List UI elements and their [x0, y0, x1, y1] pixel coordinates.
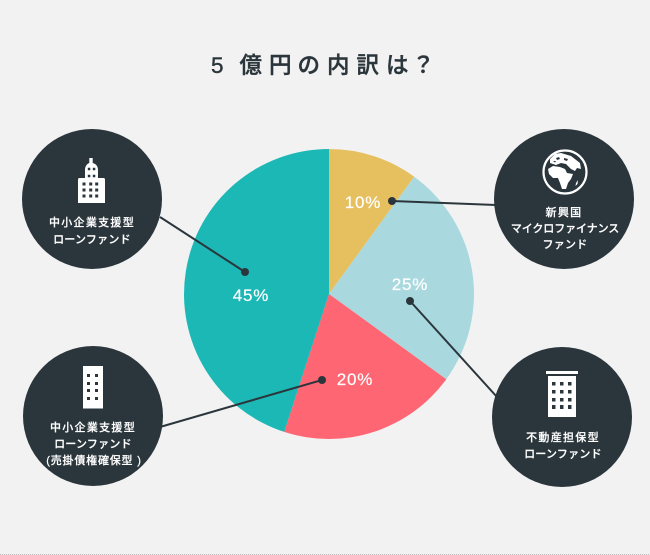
label: 中小企業支援型: [49, 215, 135, 229]
label: ローンファンド: [524, 448, 602, 460]
label: (売掛債権確保型 ): [46, 453, 142, 467]
label: ファンド: [542, 239, 588, 251]
connector: 売掛債権 to 20%: [160, 376, 326, 427]
panel: 新興国マイクロファイナンスファンド: [494, 129, 634, 269]
label: ローンファンド: [54, 438, 132, 450]
label: 不動産担保型: [526, 430, 600, 444]
percent label: 20%: 20%: [337, 370, 373, 389]
label: ローンファンド: [53, 234, 131, 246]
panel: 中小企業支援型ローンファンド: [22, 129, 162, 269]
slice: 10%: [329, 149, 414, 294]
icon: globe: [544, 150, 586, 194]
slice: 20%: [284, 294, 446, 439]
icon: office building: [83, 366, 103, 408]
icon: office block: [546, 371, 578, 417]
percent label: 45%: 45%: [233, 286, 269, 305]
connector: 新興国 to 10%: [388, 197, 496, 205]
percent label: 25%: 25%: [392, 275, 428, 294]
pie chart: [184, 149, 474, 439]
label: 中小企業支援型: [50, 420, 136, 434]
slice: 25%: [329, 177, 474, 379]
label: 新興国: [546, 205, 582, 219]
percent label: 10%: 10%: [345, 193, 381, 212]
label: マイクロファイナンス: [511, 222, 619, 235]
icon: tower building: [78, 158, 105, 203]
connector: 中小企業支援型 to 45%: [160, 217, 249, 276]
panel: 中小企業支援型ローンファンド(売掛債権確保型): [23, 346, 163, 486]
panel: 不動産担保型ローンファンド: [492, 347, 632, 487]
slice: 45%: [184, 149, 329, 432]
connector: 不動産 to 25%: [406, 297, 497, 397]
title: 5億円の内訳は？: [211, 53, 435, 78]
